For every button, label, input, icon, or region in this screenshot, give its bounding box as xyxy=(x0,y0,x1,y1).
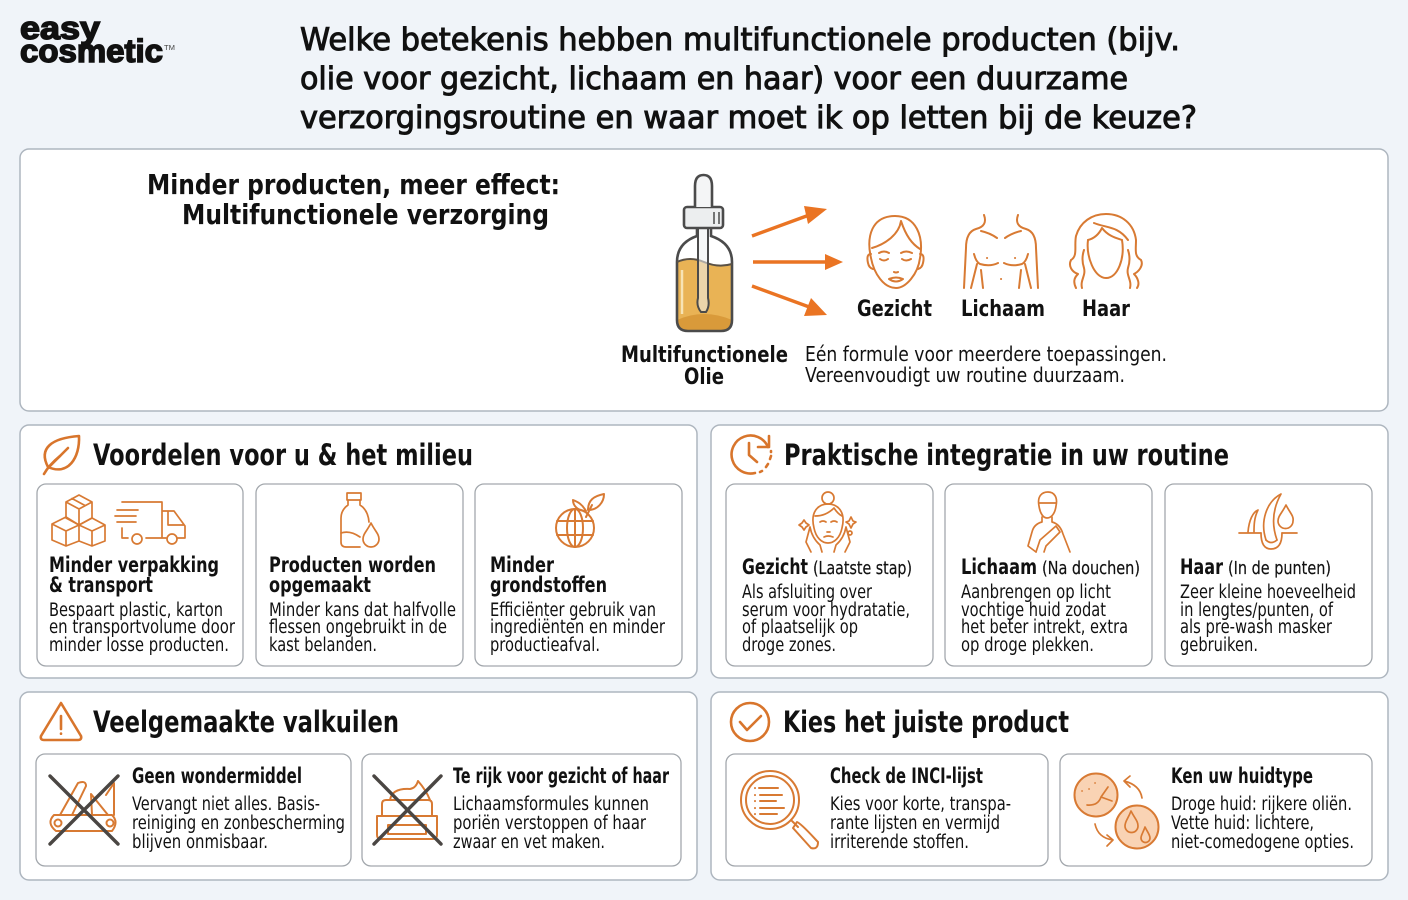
icon: warning triangle xyxy=(41,703,81,740)
card: geen wondermiddel xyxy=(36,754,351,866)
icon: skin types xyxy=(1074,774,1158,848)
card: gezicht xyxy=(726,484,933,666)
icon: check circle xyxy=(731,703,769,741)
text: gebruiken. xyxy=(1180,635,1258,656)
text: het beter intrekt, extra xyxy=(961,617,1128,638)
icon: globe with leaves xyxy=(556,494,604,547)
logo: easy xyxy=(20,10,100,46)
text: of plaatselijk op xyxy=(742,617,858,638)
text xyxy=(269,553,456,656)
heading: Veelgemaakte valkuilen xyxy=(93,705,399,739)
text: Minder verpakking xyxy=(49,553,219,577)
text xyxy=(830,764,1011,853)
icon: face xyxy=(867,216,924,288)
panel: multifunctionele verzorging xyxy=(20,149,1388,411)
text: (Laatste stap) xyxy=(813,558,912,579)
text: rante lijsten en vermijd xyxy=(830,813,1000,834)
text: Geen wondermiddel xyxy=(132,764,302,788)
title: olie voor gezicht, lichaam en haar) voor een duurzame xyxy=(300,61,1128,97)
text: reiniging en zonbescherming xyxy=(132,813,345,834)
text: droge zones. xyxy=(742,635,836,656)
arrows to face, body and hair xyxy=(752,206,843,316)
subheading: Multifunctionele verzorging xyxy=(182,198,549,231)
text: Zeer kleine hoeveelheid xyxy=(1180,582,1356,603)
labels: targets: Haar xyxy=(1082,297,1130,322)
text: Minder kans dat halfvolle xyxy=(269,600,456,621)
text: Check de INCI-lijst xyxy=(830,764,983,788)
icon: torso xyxy=(964,215,1038,288)
text: & transport xyxy=(49,573,153,597)
icon: crossed-out jar xyxy=(374,776,441,844)
icon: clock xyxy=(732,436,771,474)
card: minder verpakking xyxy=(37,484,243,666)
text: en transportvolume door xyxy=(49,617,235,638)
card: te rijk xyxy=(362,754,681,866)
text: poriën verstoppen of haar xyxy=(453,813,646,834)
label: multifunctionele olie: Multifunctionele xyxy=(621,343,788,368)
title: Welke betekenis hebben multifunctionele producten (bijv. xyxy=(300,22,1180,58)
text: grondstoffen xyxy=(490,573,607,597)
text: Droge huid: rijkere oliën. xyxy=(1171,794,1352,815)
text: Aanbrengen op licht xyxy=(961,582,1111,603)
text: Haar xyxy=(1180,555,1223,579)
card: haar xyxy=(1165,484,1372,666)
panel: valkuilen xyxy=(20,692,697,880)
heading: Voordelen voor u & het milieu xyxy=(93,438,473,472)
icon: leaf xyxy=(44,436,79,474)
card: inci-lijst xyxy=(726,754,1048,866)
text: ingrediënten en minder xyxy=(490,617,665,638)
text xyxy=(1171,764,1354,853)
text: Vette huid: lichtere, xyxy=(1171,813,1314,834)
text xyxy=(132,764,345,853)
text: Gezicht xyxy=(742,555,808,579)
logo: TM xyxy=(164,45,175,52)
title xyxy=(300,22,1197,136)
title: verzorgingsroutine en waar moet ik op letten bij de keuze? xyxy=(300,100,1197,136)
text: vochtige huid zodat xyxy=(961,600,1106,621)
subheading xyxy=(147,168,560,231)
text: in lengtes/punten, of xyxy=(1180,600,1333,621)
icon: bottle and drop xyxy=(341,493,379,547)
text xyxy=(961,555,1140,656)
text: als pre-wash masker xyxy=(1180,617,1332,638)
text: op droge plekken. xyxy=(961,635,1094,656)
text: zwaar en vet maken. xyxy=(453,832,605,853)
card: huidtype xyxy=(1060,754,1372,866)
labels: targets xyxy=(857,297,1130,322)
label: multifunctionele olie: Olie xyxy=(684,365,724,390)
text: Kies voor korte, transpa- xyxy=(830,794,1011,815)
description: Vereenvoudigt uw routine duurzaam. xyxy=(805,363,1125,387)
card: minder grondstoffen xyxy=(475,484,682,666)
panel: kies het juiste product xyxy=(711,692,1388,880)
panel: praktische integratie xyxy=(711,425,1388,678)
text: Te rijk voor gezicht of haar xyxy=(453,764,669,788)
labels: targets: Lichaam xyxy=(961,297,1045,322)
label: multifunctionele olie xyxy=(621,343,788,390)
text: (Na douchen) xyxy=(1042,558,1140,579)
text: irriterende stoffen. xyxy=(830,832,969,853)
text: niet-comedogene opties. xyxy=(1171,832,1354,853)
heading: Kies het juiste product xyxy=(783,705,1069,739)
subheading: Minder producten, meer effect: xyxy=(147,168,560,201)
heading: Praktische integratie in uw routine xyxy=(784,438,1229,472)
text: Ken uw huidtype xyxy=(1171,764,1313,788)
text: Als afsluiting over xyxy=(742,582,872,603)
description: Eén formule voor meerdere toepassingen. xyxy=(805,342,1167,366)
icon: crossed-out multitool xyxy=(50,776,118,844)
panel: voordelen xyxy=(20,425,697,678)
icon: hair strand and drop xyxy=(1239,494,1297,549)
icon: face with hands and sparkles xyxy=(799,492,856,552)
icon: hair xyxy=(1070,214,1142,288)
text: Efficiënter gebruik van xyxy=(490,600,656,621)
text xyxy=(49,553,235,656)
text xyxy=(490,553,665,656)
text: serum voor hydratatie, xyxy=(742,600,910,621)
text xyxy=(1180,555,1356,656)
text xyxy=(453,764,669,853)
text: flessen ongebruikt in de xyxy=(269,617,447,638)
icon: dropper bottle xyxy=(677,175,732,331)
description xyxy=(805,342,1167,387)
text: Bespaart plastic, karton xyxy=(49,600,223,621)
text xyxy=(742,555,912,656)
icon: person applying oil xyxy=(1028,492,1070,552)
text: (In de punten) xyxy=(1228,558,1331,579)
logo xyxy=(20,10,175,69)
text: minder losse producten. xyxy=(49,635,229,656)
text: Vervangt niet alles. Basis- xyxy=(132,794,320,815)
text: Producten worden xyxy=(269,553,436,577)
text: Lichaam xyxy=(961,555,1037,579)
text: kast belanden. xyxy=(269,635,377,656)
card: lichaam xyxy=(945,484,1152,666)
logo: cosmetic xyxy=(20,33,163,69)
text: Minder xyxy=(490,553,554,577)
text: blijven onmisbaar. xyxy=(132,832,268,853)
card: producten opgemaakt xyxy=(256,484,463,666)
text: opgemaakt xyxy=(269,573,371,597)
icon: magnifier over list xyxy=(741,771,818,848)
labels: targets: Gezicht xyxy=(857,297,932,322)
icon: boxes and truck xyxy=(52,495,185,546)
text: productieafval. xyxy=(490,635,600,656)
text: Lichaamsformules kunnen xyxy=(453,794,649,815)
